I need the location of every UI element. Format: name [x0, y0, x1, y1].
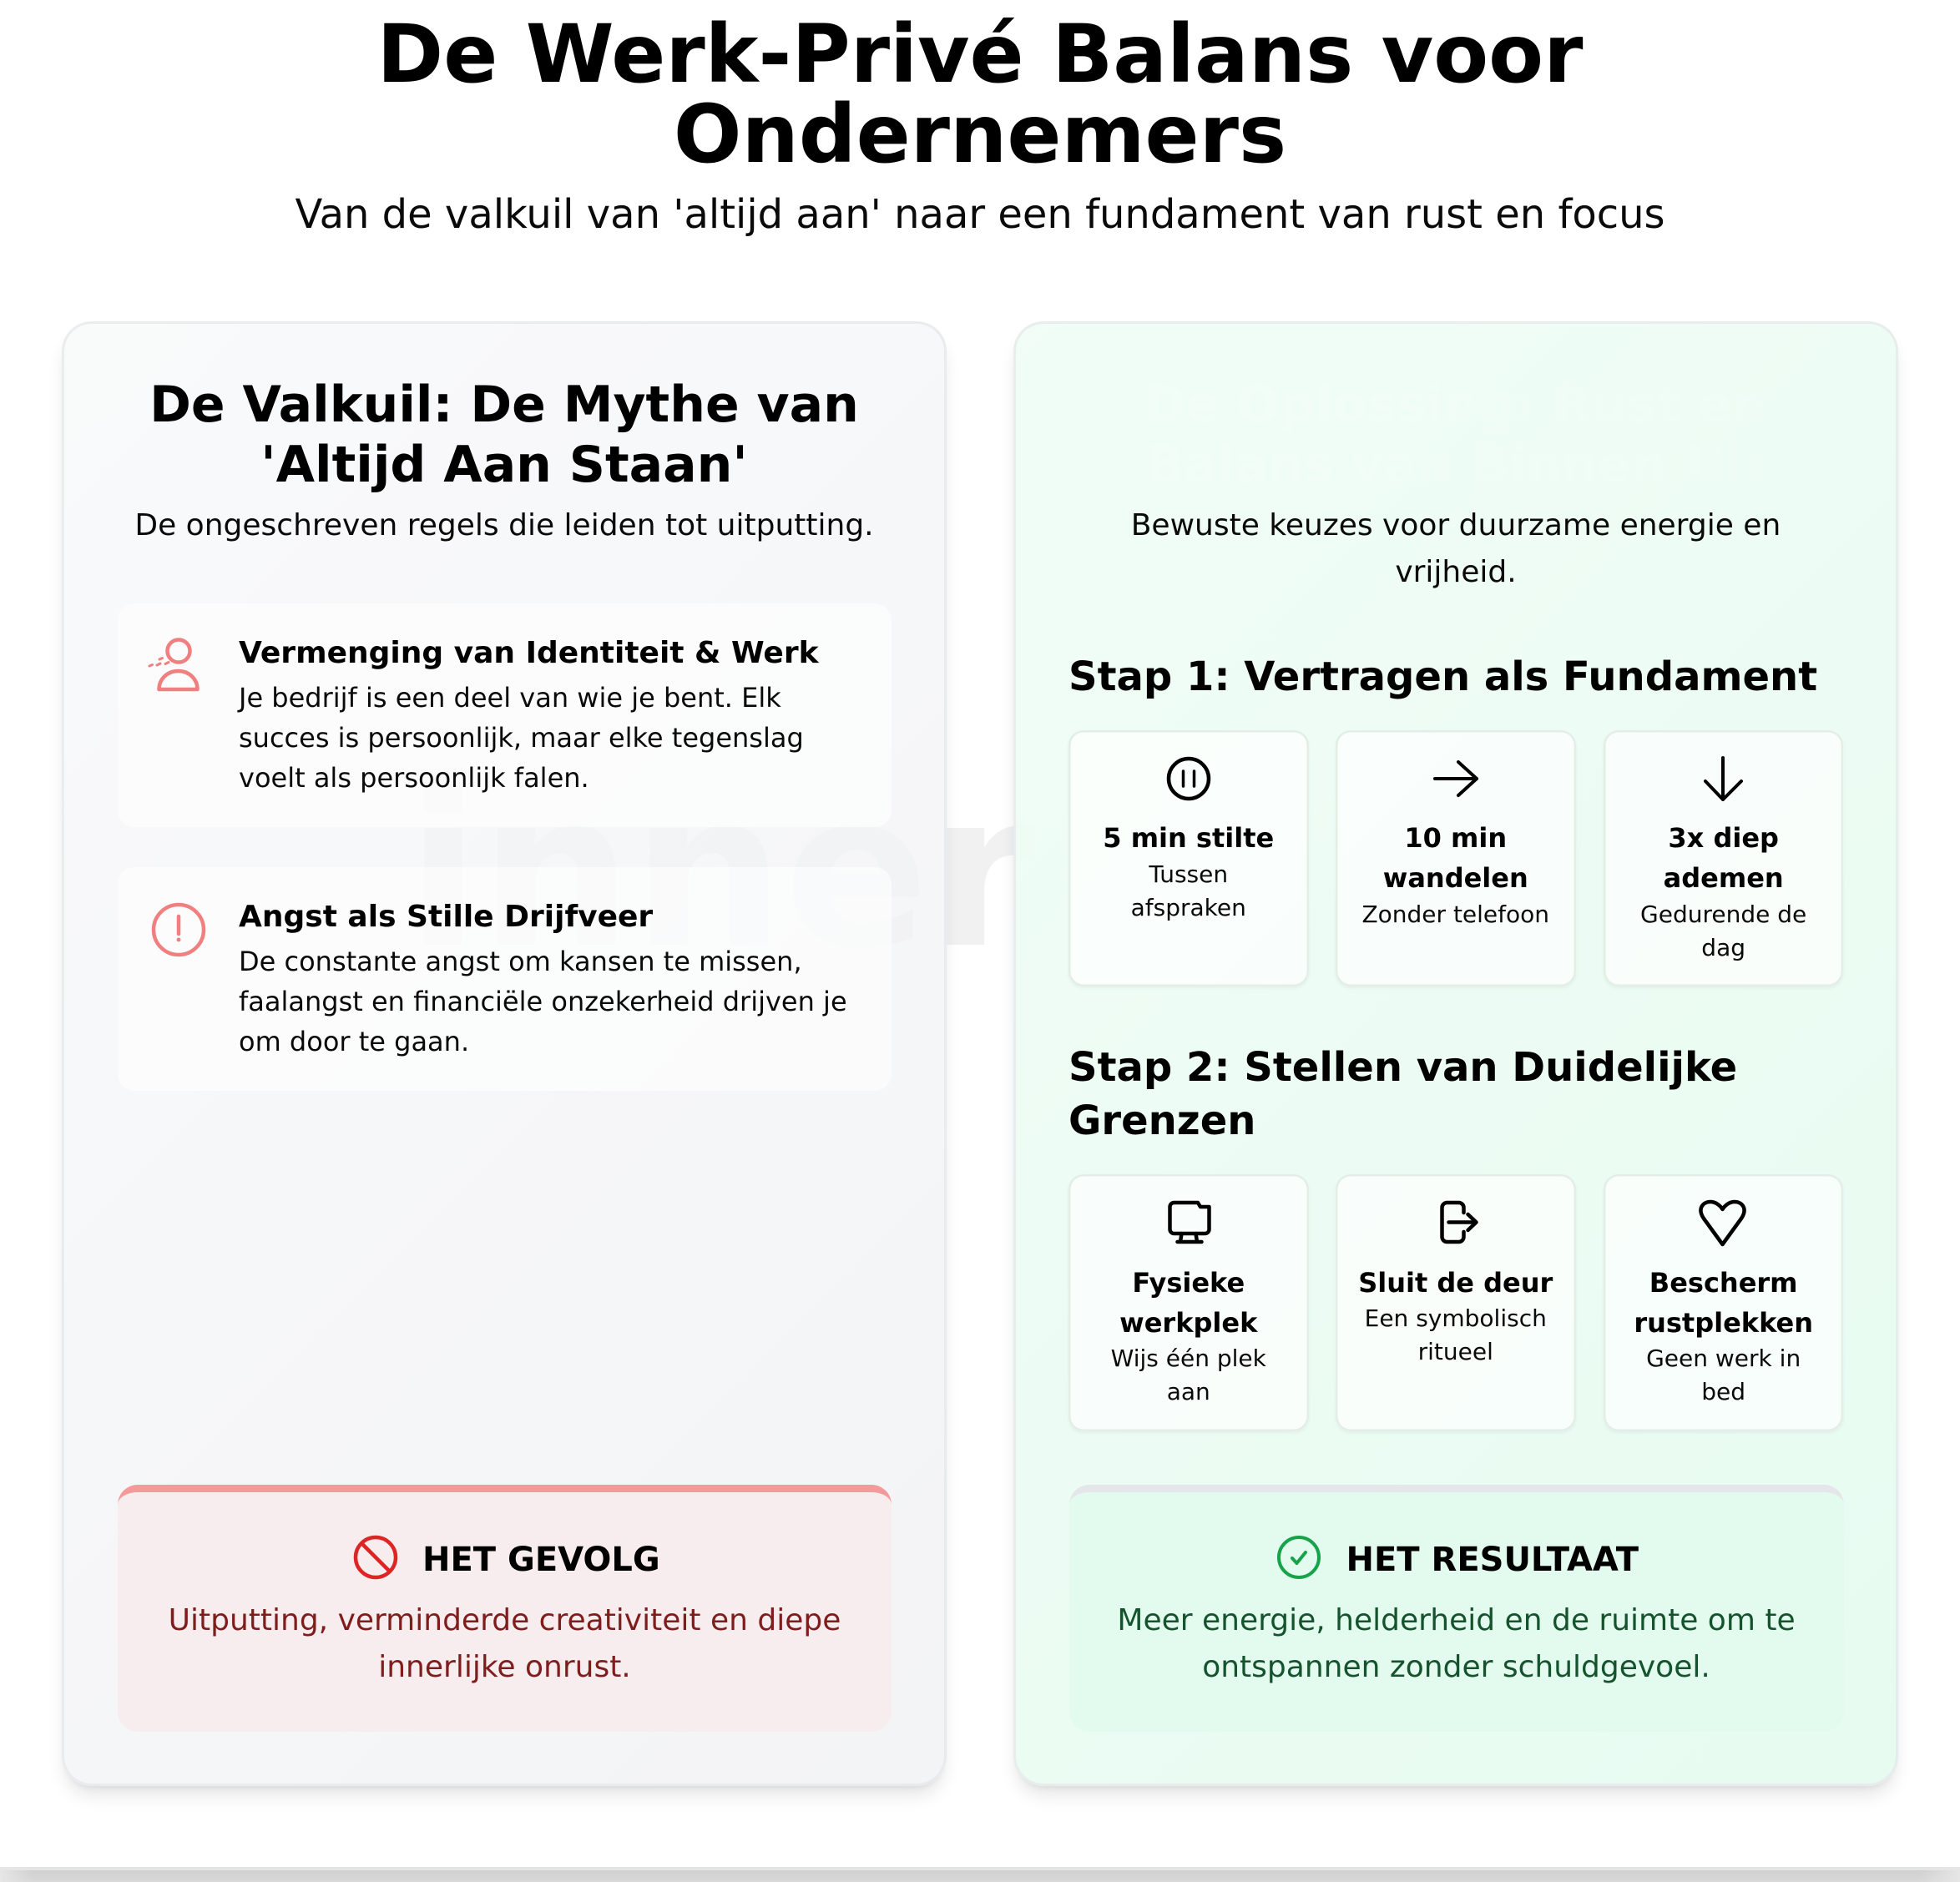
card text	[237, 682, 804, 794]
panel subtitle	[1131, 507, 1781, 589]
heading: stap 2	[1068, 1043, 1737, 1144]
card text: faalangst en financiële onzekerheid drijven je	[239, 986, 847, 1017]
tile: sluit de deur	[1336, 1174, 1576, 1431]
card heading: Vermenging van Identiteit & Werk	[239, 636, 819, 670]
tile text: Wijs één plek	[1111, 1344, 1266, 1372]
heading: nearly invisible panel title: De Oplossing: Rust en	[1144, 376, 1768, 434]
panel subtitle: De ongeschreven regels die leiden tot uitputting.	[134, 507, 874, 542]
tile: bescherm rustplekken	[1604, 1174, 1843, 1431]
tile text	[1365, 1304, 1547, 1365]
panel subtitle: vrijheid.	[1395, 554, 1517, 589]
card heading: Angst als Stille Drijfveer	[239, 900, 653, 934]
tile heading: werkplek	[1119, 1307, 1257, 1339]
callout heading: HET RESULTAAT	[1346, 1541, 1639, 1579]
tile heading: Bescherm	[1649, 1267, 1798, 1299]
tile text: Zonder telefoon	[1361, 901, 1549, 928]
tile text: ritueel	[1418, 1338, 1493, 1365]
card text: De constante angst om kansen te missen,	[239, 946, 802, 977]
callout text	[1117, 1603, 1796, 1684]
icon: heart	[1699, 1200, 1746, 1247]
callout heading: HET GEVOLG	[422, 1541, 660, 1579]
tile heading: Fysieke	[1132, 1267, 1245, 1299]
tile: fysieke werkplek	[1068, 1174, 1309, 1431]
subtitle: Van de valkuil van 'altijd aan' naar een fundament van rust en focus	[295, 191, 1665, 238]
title: Ondernemers	[674, 87, 1286, 180]
tile text	[1646, 1344, 1801, 1405]
icon: pause	[1167, 756, 1210, 801]
icon: door exit	[1440, 1200, 1478, 1244]
tile text: dag	[1701, 934, 1745, 961]
tile: 5 min stilte	[1068, 730, 1309, 986]
tile text: bed	[1701, 1377, 1745, 1405]
tile heading	[1634, 1267, 1813, 1339]
panel subtitle: Bewuste keuzes voor duurzame energie en	[1131, 507, 1781, 542]
card text: om door te gaan.	[239, 1026, 469, 1057]
icon: monitor	[1168, 1200, 1211, 1244]
tile text: aan	[1167, 1377, 1210, 1405]
callout: het gevolg	[118, 1485, 892, 1732]
card text: voelt als persoonlijk falen.	[239, 762, 589, 794]
callout text: ontspannen zonder schuldgevoel.	[1202, 1649, 1710, 1684]
tile text: afspraken	[1131, 893, 1246, 921]
bottom footer strip	[0, 1867, 1960, 1882]
tile text: Een symbolisch	[1365, 1304, 1547, 1332]
panel: de oplossing	[1013, 321, 1898, 1786]
tile text: Geen werk in	[1646, 1344, 1801, 1372]
card text: Je bedrijf is een deel van wie je bent. Elk	[239, 682, 781, 714]
tile heading	[1383, 822, 1528, 894]
heading: stap 2: Grenzen	[1068, 1097, 1255, 1144]
tile heading	[1664, 822, 1784, 894]
tile: 3x diep ademen	[1604, 730, 1843, 986]
card: vermenging van identiteit en werk	[118, 603, 892, 827]
tile heading: ademen	[1664, 862, 1784, 894]
tile text	[1640, 901, 1806, 961]
icon: check circle	[1277, 1536, 1321, 1579]
icon: person	[149, 638, 200, 691]
heading: de valkuil: De Valkuil: De Mythe van	[149, 376, 859, 434]
heading: nearly invisible panel title	[1013, 375, 1898, 495]
tile heading: 10 min	[1404, 822, 1507, 854]
heading: de valkuil: 'Altijd Aan Staan'	[260, 436, 748, 494]
background watermark: inner: inner	[407, 747, 1034, 996]
title	[377, 7, 1583, 180]
heading: stap 2: Stap 2: Stellen van Duidelijke	[1068, 1043, 1737, 1090]
tile text	[1111, 1344, 1266, 1405]
tile text	[1131, 860, 1246, 921]
icon: arrow down	[1703, 756, 1743, 801]
callout text: Uitputting, verminderde creativiteit en diepe	[169, 1603, 841, 1637]
tile heading: wandelen	[1383, 862, 1528, 894]
callout text	[169, 1603, 841, 1684]
heading: stap 1: Stap 1: Vertragen als Fundament	[1068, 653, 1817, 700]
tile heading: Sluit de deur	[1358, 1267, 1553, 1299]
tile text: Gedurende de	[1640, 901, 1806, 928]
title: De Werk-Privé Balans voor	[377, 7, 1583, 100]
tile heading: 3x diep	[1668, 822, 1779, 854]
icon: prohibited	[354, 1536, 397, 1579]
tile text: Tussen	[1149, 860, 1228, 888]
panel: de valkuil	[62, 321, 947, 1786]
callout text: Meer energie, helderheid en de ruimte om te	[1117, 1603, 1796, 1637]
tile heading: rustplekken	[1634, 1307, 1813, 1339]
callout: het resultaat	[1068, 1485, 1843, 1732]
heading: de valkuil	[149, 376, 859, 494]
heading: nearly invisible panel title: Balans van Binnen Uit	[1145, 436, 1766, 494]
tile: 10 min wandelen	[1336, 730, 1576, 986]
tile heading: 5 min stilte	[1103, 822, 1274, 854]
card: angst als stille drijfveer	[118, 867, 892, 1091]
card text: succes is persoonlijk, maar elke tegenslag	[239, 722, 804, 754]
icon: alert circle	[152, 903, 205, 956]
tile heading	[1119, 1267, 1258, 1339]
card text	[239, 946, 847, 1057]
callout text: innerlijke onrust.	[378, 1649, 631, 1684]
icon: arrow right	[1433, 759, 1479, 798]
